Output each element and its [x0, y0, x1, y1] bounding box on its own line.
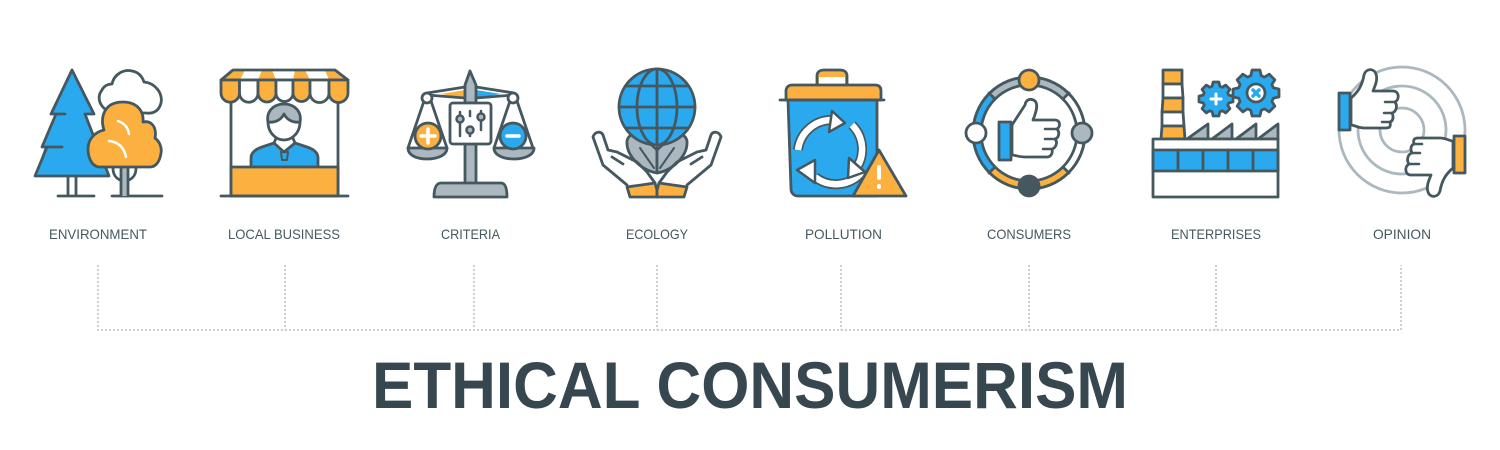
- label: consumers: CONSUMERS: [987, 226, 1071, 242]
- label: opinion: OPINION: [1373, 226, 1431, 242]
- roof: [1187, 124, 1278, 139]
- control box: [450, 103, 491, 144]
- awning: [221, 70, 348, 102]
- chimney: [1161, 70, 1185, 139]
- label: pollution: POLLUTION: [805, 226, 882, 242]
- person: [251, 104, 318, 167]
- globe: [619, 69, 695, 145]
- label: ecology: ECOLOGY: [626, 226, 689, 242]
- icon: local business stall: [221, 70, 348, 196]
- icon: opinion thumbs: [1339, 67, 1465, 196]
- leaves: [627, 134, 657, 173]
- thumbs up: [999, 99, 1059, 160]
- label: enterprises: ENTERPRISES: [1171, 226, 1261, 242]
- small gear: [1199, 82, 1233, 116]
- icon: criteria scales: [408, 71, 534, 197]
- hands: [593, 132, 655, 185]
- label: local business: LOCAL BUSINESS: [228, 226, 340, 242]
- recycle arrows: [797, 111, 865, 184]
- beam: [427, 87, 465, 98]
- thumb up: [1339, 70, 1398, 130]
- icon: ecology globe and hands: [593, 69, 721, 197]
- icon: consumers ring: [966, 70, 1092, 196]
- cuffs: [627, 183, 657, 197]
- large gear: [1233, 70, 1279, 116]
- concentric rings: [1339, 67, 1465, 193]
- left pan: [408, 93, 447, 159]
- warning triangle: [853, 150, 906, 196]
- icon: enterprises factory: [1153, 70, 1279, 197]
- icon: environment trees: [35, 70, 162, 196]
- title: ETHICAL CONSUMERISM: [372, 348, 1128, 422]
- right pan: [494, 93, 534, 159]
- icon: pollution bin: [780, 70, 906, 196]
- connector lines: [98, 265, 1401, 330]
- counter: [231, 167, 338, 196]
- thumb down: [1406, 136, 1465, 196]
- body: [1153, 139, 1278, 197]
- label: criteria: CRITERIA: [441, 226, 501, 242]
- label: environment: ENVIRONMENT: [49, 226, 147, 242]
